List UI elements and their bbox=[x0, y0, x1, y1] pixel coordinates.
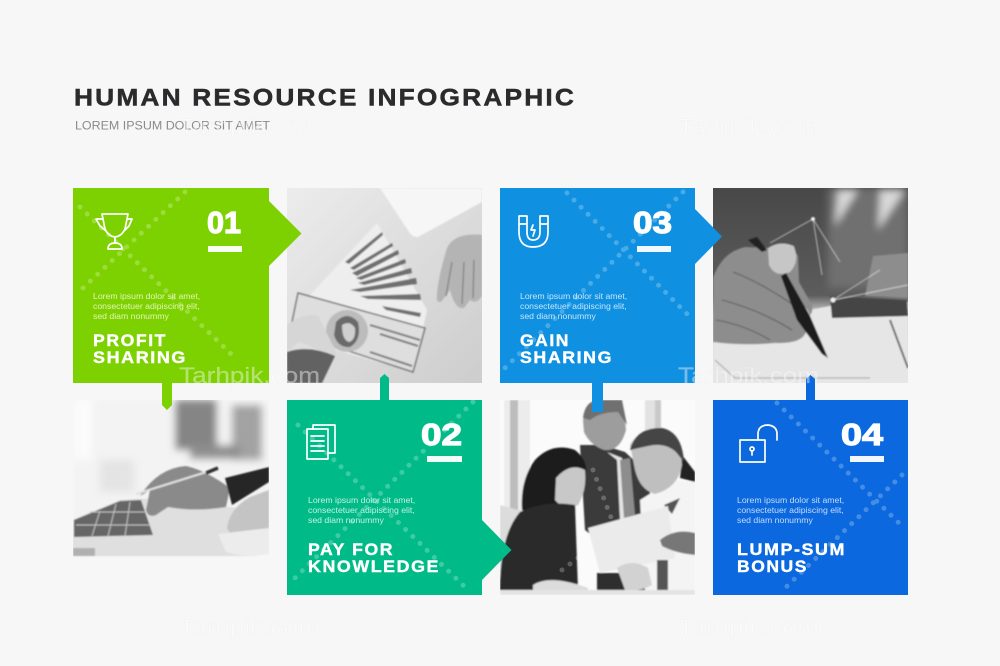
body text: Lorem ipsum dolor sit amet, bbox=[520, 291, 627, 301]
label: gain sharing: GAIN bbox=[520, 331, 570, 350]
title: HUMAN RESOURCE INFOGRAPHIC bbox=[74, 84, 576, 112]
icon: magnet bbox=[519, 216, 548, 247]
body text: sed diam nonummy bbox=[93, 311, 169, 321]
photo: hand with pen bbox=[713, 188, 908, 383]
photo: laptop typing bbox=[73, 400, 269, 557]
body text: Lorem ipsum dolor sit amet, bbox=[308, 495, 415, 505]
panel: 04 lump-sum bonus bbox=[713, 375, 908, 595]
label: pay for knowledge: PAY FOR bbox=[308, 540, 394, 559]
card shape: blue with arrow bbox=[500, 188, 722, 412]
subtitle: LOREM IPSUM DOLOR SIT AMET bbox=[75, 118, 271, 132]
watermarks: Tarhpik.com bbox=[678, 363, 819, 388]
underline bbox=[637, 246, 671, 252]
card shape: teal with arrow bbox=[287, 374, 512, 595]
panel: 03 gain sharing bbox=[500, 188, 722, 412]
body text: consectetuer adipiscing elit, bbox=[520, 301, 627, 311]
body text: consectetuer adipiscing elit, bbox=[308, 505, 415, 515]
underline bbox=[427, 456, 462, 462]
watermarks: Tarhpik.com bbox=[179, 114, 320, 139]
underline bbox=[208, 246, 242, 252]
icon: trophy bbox=[96, 214, 132, 249]
label: gain sharing: SHARING bbox=[520, 348, 613, 367]
number 02: 02 bbox=[421, 417, 462, 452]
number 01: 01 bbox=[207, 205, 241, 240]
watermarks: Tarhpik.com bbox=[179, 363, 320, 388]
underline bbox=[850, 456, 884, 462]
watermarks: Tarhpik.com bbox=[179, 615, 320, 640]
label: lump-sum bonus: BONUS bbox=[737, 557, 808, 576]
watermarks bbox=[179, 114, 819, 640]
watermarks: Tarhpik.com bbox=[678, 114, 819, 139]
body text: consectetuer adipiscing elit, bbox=[93, 301, 200, 311]
icon: documents bbox=[307, 425, 335, 459]
body text: sed diam nonummy bbox=[737, 515, 813, 525]
icon: open padlock bbox=[740, 425, 777, 462]
body text: consectetuer adipiscing elit, bbox=[737, 505, 844, 515]
body text: Lorem ipsum dolor sit amet, bbox=[93, 291, 200, 301]
label: profit sharing: PROFIT bbox=[93, 331, 167, 350]
photo: business team bbox=[500, 400, 695, 595]
photo: money handover bbox=[287, 188, 482, 383]
body text: sed diam nonummy bbox=[520, 311, 596, 321]
body text: sed diam nonummy bbox=[308, 515, 384, 525]
body text: Lorem ipsum dolor sit amet, bbox=[737, 495, 844, 505]
watermarks: Tarhpik.com bbox=[678, 615, 819, 640]
card shape: green with arrow bbox=[73, 188, 302, 410]
number 04: 04 bbox=[841, 417, 884, 452]
panel: 01 profit sharing bbox=[73, 188, 302, 410]
label: pay for knowledge: KNOWLEDGE bbox=[308, 557, 440, 576]
panel: 02 pay for knowledge bbox=[287, 374, 512, 595]
label: profit sharing: SHARING bbox=[93, 348, 187, 367]
label: lump-sum bonus: LUMP-SUM bbox=[737, 540, 846, 559]
card shape: royal blue bbox=[713, 375, 908, 595]
number 03: 03 bbox=[633, 205, 672, 240]
